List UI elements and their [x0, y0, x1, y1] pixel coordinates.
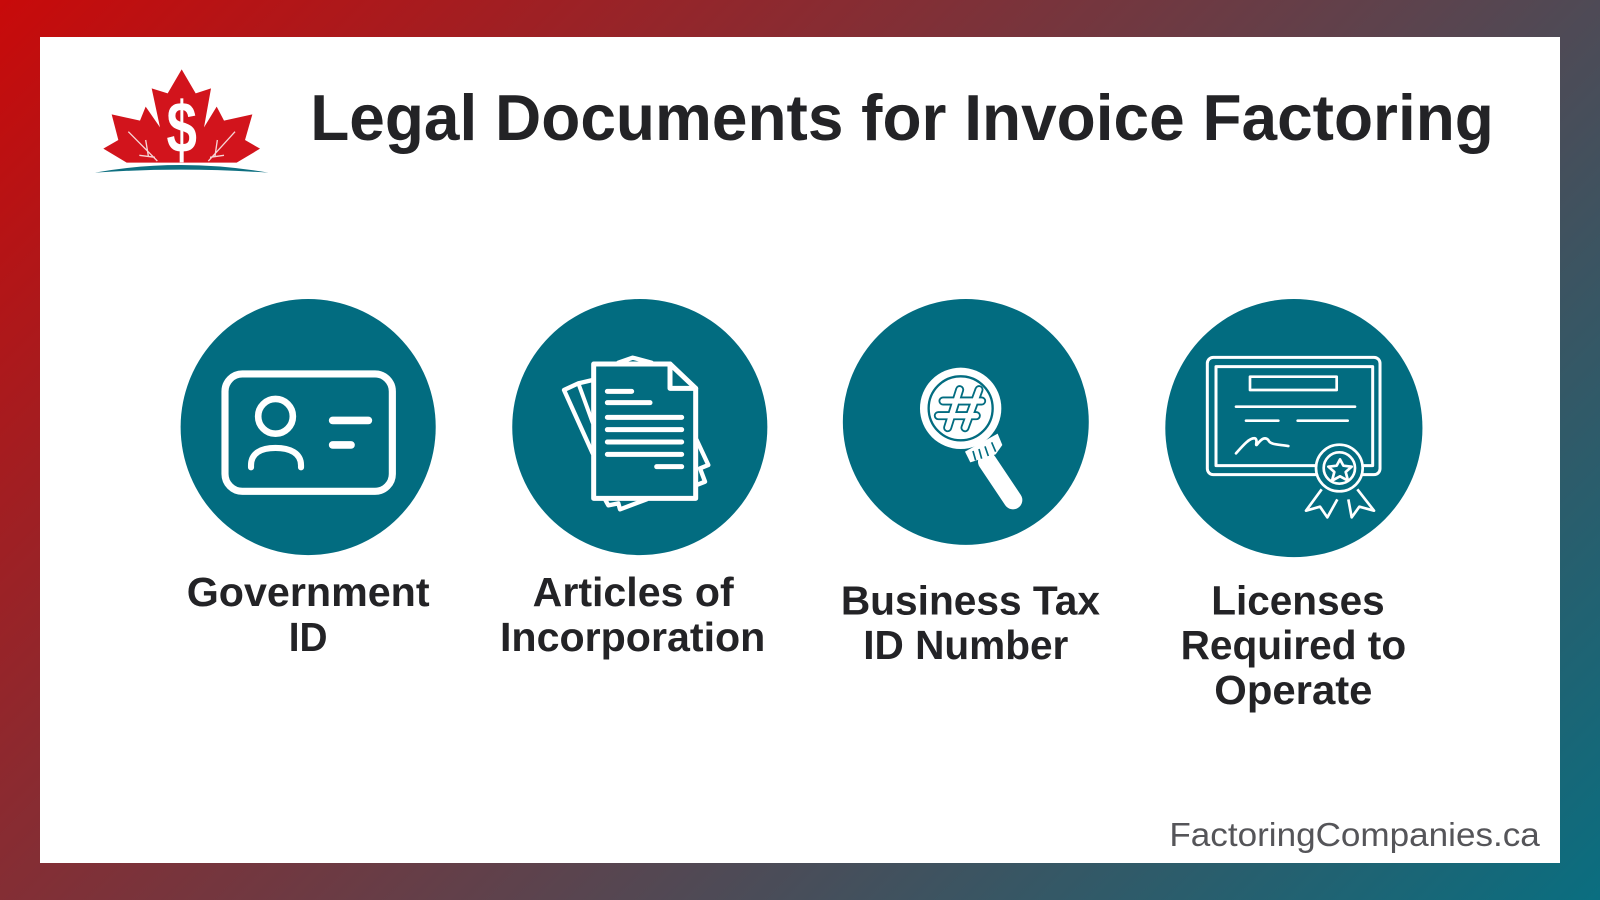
circle: Government ID [181, 299, 436, 555]
label: Government ID: Government [187, 569, 430, 615]
label: Articles of Incorporation: Articles of [533, 569, 734, 615]
icon: certificate with seal [1207, 357, 1380, 517]
label: Licenses Required to Operate: Required to [1181, 622, 1406, 668]
icon: stacked documents [564, 358, 708, 509]
label: Business Tax ID Number: ID Number [863, 622, 1068, 668]
label: Licenses Required to Operate [1181, 577, 1406, 713]
panel: Articles of Incorporation [500, 299, 767, 660]
panel: Business Tax ID Number [841, 299, 1100, 668]
label: Licenses Required to Operate: Operate [1214, 667, 1372, 713]
icon: maple leaf logo [95, 69, 268, 173]
icon: maple leaf logo: $ [166, 87, 197, 168]
icon: magnifying glass with hash [920, 368, 1013, 500]
circle: Business Tax ID Number [843, 299, 1089, 545]
label: Government ID: ID [289, 614, 328, 660]
label: Articles of Incorporation: Incorporation [500, 614, 765, 660]
circle: Articles of Incorporation [512, 299, 767, 555]
label: Government ID [187, 569, 430, 660]
label: Business Tax ID Number: Business Tax [841, 577, 1100, 623]
icon: ID card [225, 374, 392, 491]
circle: Licenses Required to Operate [1165, 299, 1422, 557]
footer website text: FactoringCompanies.ca [1169, 817, 1540, 854]
label: Business Tax ID Number [841, 577, 1100, 668]
title: Legal Documents for Invoice Factoring [310, 81, 1494, 154]
label: Articles of Incorporation [500, 569, 765, 660]
panel: Government ID [181, 299, 436, 660]
label: Licenses Required to Operate: Licenses [1211, 577, 1385, 623]
panel: Licenses Required to Operate [1165, 299, 1422, 713]
